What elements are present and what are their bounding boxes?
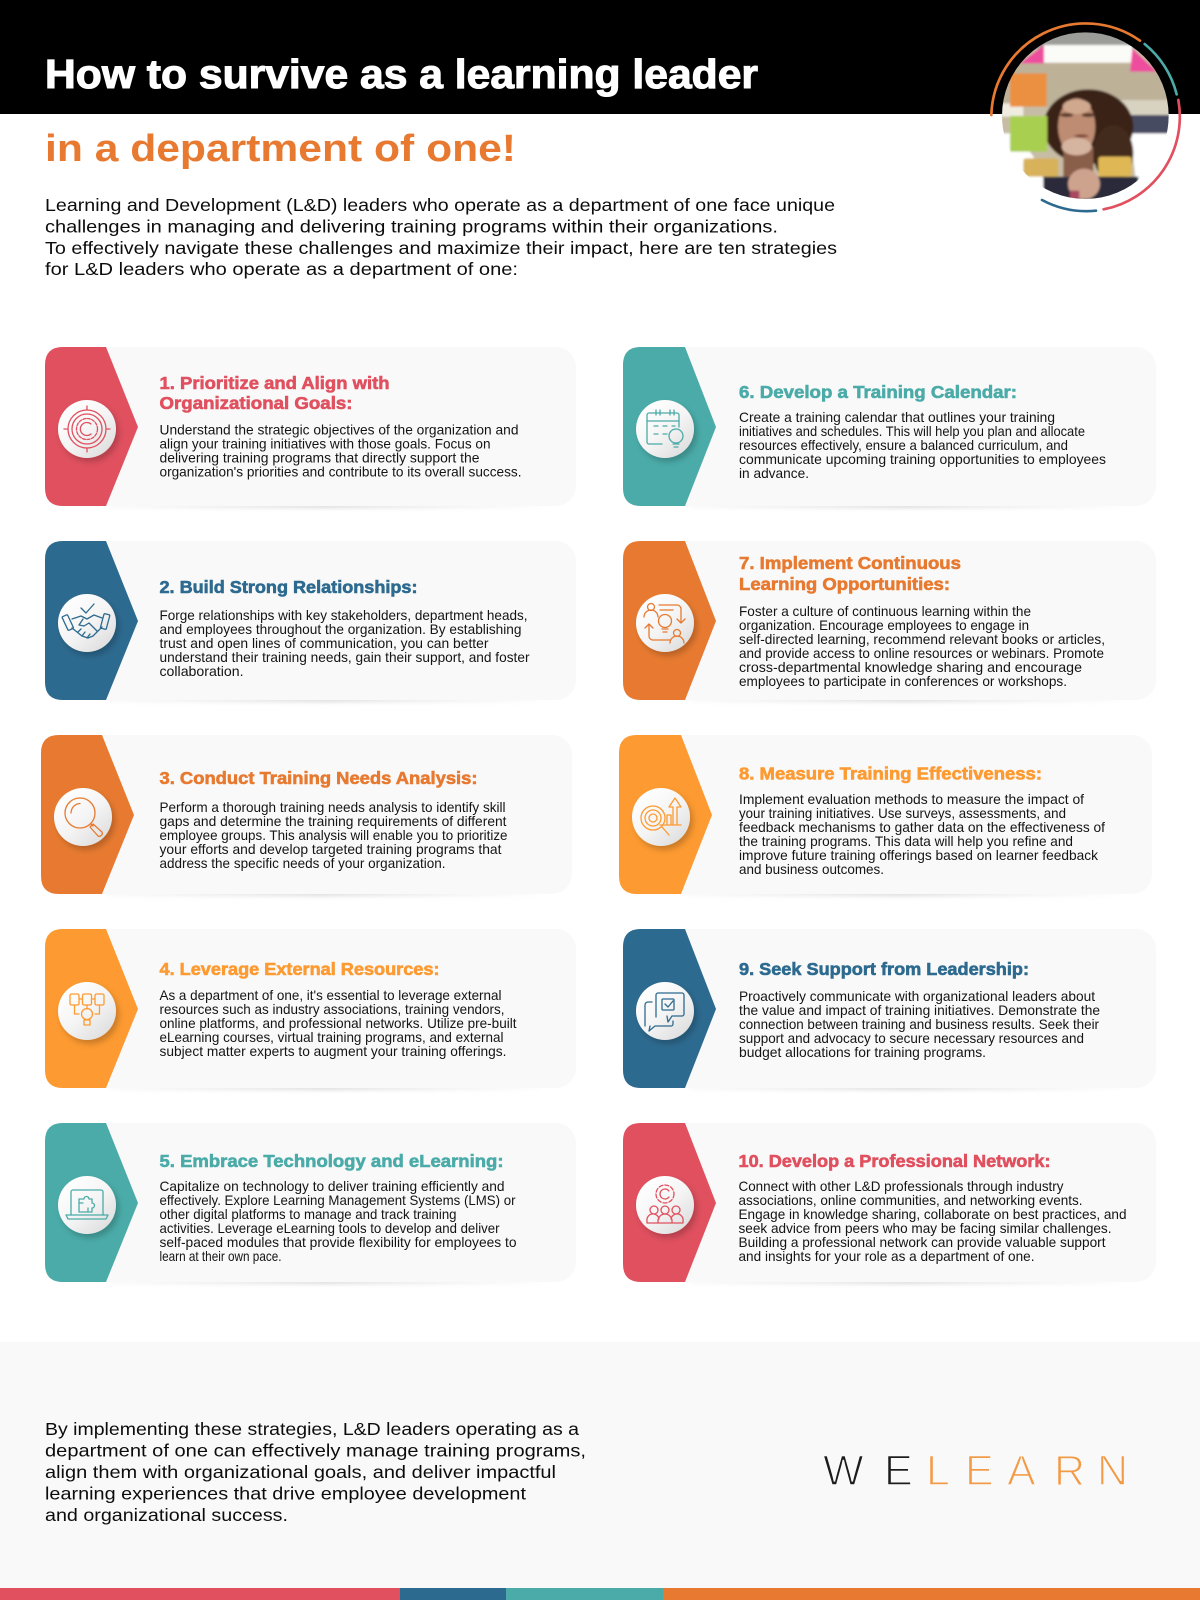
body text	[160, 1179, 516, 1264]
body text: employee groups. This analysis will enable you to prioritize	[160, 828, 508, 843]
body text: Capitalize on technology to deliver training efficiently and	[160, 1179, 504, 1194]
body text: feedback mechanisms to gather data on the effectiveness of	[739, 820, 1105, 835]
heading: 9. Seek Support from Leadership:	[739, 959, 1029, 979]
logo: WE LEARN: WE	[823, 1447, 913, 1495]
panel: strategy 5	[45, 1123, 576, 1284]
icon: handshake	[62, 604, 110, 638]
body text: online platforms, and professional networks. Utilize pre-built	[160, 1016, 517, 1031]
body text: Implement evaluation methods to measure the impact of	[739, 792, 1084, 807]
body text: Forge relationships with key stakeholders, department heads,	[160, 608, 528, 623]
body text: Building a professional network can provide valuable support	[738, 1235, 1106, 1250]
heading: 2. Build Strong Relationships:	[160, 577, 418, 597]
body text: the value and impact of training initiatives. Demonstrate the	[739, 1003, 1100, 1018]
ring arcs	[991, 23, 1140, 115]
body text: improve future training offerings based on learner feedback	[739, 848, 1098, 863]
heading: 1. Prioritize and Align with	[160, 373, 390, 393]
body text: in advance.	[739, 466, 809, 481]
heading: 5. Embrace Technology and eLearning:	[160, 1151, 504, 1171]
intro paragraph: challenges in managing and delivering training programs within their organizations.	[45, 216, 778, 236]
heading: Learning Opportunities:	[739, 574, 950, 594]
body text: collaboration.	[160, 664, 244, 679]
body text	[739, 604, 1105, 689]
body text	[160, 800, 508, 871]
body text: resources such as industry associations, training vendors,	[160, 1002, 504, 1017]
body text: organization. Encourage employees to engage in	[739, 618, 1029, 633]
body text: Connect with other L&D professionals through industry	[738, 1179, 1064, 1194]
closing paragraph: department of one can effectively manage training programs,	[45, 1440, 586, 1460]
body text: cross-departmental knowledge sharing and encourage	[739, 660, 1082, 675]
heading: 10. Develop a Professional Network:	[738, 1151, 1050, 1171]
panel: strategy 9	[623, 929, 1156, 1090]
body text: self-paced modules that provide flexibility for employees to	[160, 1235, 516, 1250]
intro paragraph	[45, 195, 837, 279]
body text: As a department of one, it's essential to leverage external	[160, 988, 502, 1003]
icon: process bulb	[70, 994, 104, 1025]
heading: 6. Develop a Training Calendar:	[739, 382, 1017, 402]
icon: magnifier	[65, 798, 102, 836]
panel: strategy 7	[623, 541, 1156, 702]
heading: 7. Implement Continuous	[739, 553, 961, 573]
icon: target gear	[64, 406, 110, 452]
body text: trust and open lines of communication, you can better	[160, 636, 489, 651]
body text: seek advice from peers who may be facing similar challenges.	[738, 1221, 1112, 1236]
icon: chat check	[645, 993, 684, 1031]
intro paragraph: for L&D leaders who operate as a department of one:	[45, 259, 518, 279]
panel: strategy 8	[619, 735, 1152, 896]
heading: Organizational Goals:	[160, 393, 352, 413]
body text: associations, online communities, and networking events.	[738, 1193, 1082, 1208]
icon: learning cycle	[644, 604, 685, 643]
body text: and provide access to online resources or webinars. Promote	[739, 646, 1104, 661]
body text: Proactively communicate with organizational leaders about	[739, 989, 1095, 1004]
subtitle: in a department of one!	[45, 128, 516, 170]
heading: 4. Leverage External Resources:	[160, 959, 440, 979]
body text: Foster a culture of continuous learning within the	[739, 604, 1031, 619]
body text: support and advocacy to secure necessary resources and	[739, 1031, 1084, 1046]
logo: WE LEARN	[823, 1447, 1128, 1495]
icon: gear people	[647, 1185, 683, 1223]
hair	[1043, 89, 1133, 164]
title: How to survive as a learning leader	[45, 51, 758, 97]
body text: and insights for your role as a department of one.	[738, 1249, 1034, 1264]
heading: 8. Measure Training Effectiveness:	[739, 764, 1042, 784]
body text: communicate upcoming training opportunities to employees	[739, 452, 1106, 467]
body text: and employees throughout the organization. By establishing	[160, 622, 522, 637]
icon: chart magnifier	[641, 798, 681, 835]
body text	[739, 792, 1105, 877]
body text: employees to participate in conferences or workshops.	[739, 674, 1067, 689]
body text: your training initiatives. Use surveys, assessments, and	[739, 806, 1066, 821]
body text: connection between training and business results. Seek their	[739, 1017, 1099, 1032]
panel: strategy 4	[45, 929, 576, 1090]
body text	[739, 989, 1100, 1060]
closing paragraph: and organizational success.	[45, 1505, 288, 1525]
body text: activities. Leverage eLearning tools to develop and deliver	[160, 1221, 500, 1236]
body text: effectively. Explore Learning Management Systems (LMS) or	[160, 1193, 516, 1208]
heading: 3. Conduct Training Needs Analysis:	[160, 768, 478, 788]
body text: eLearning courses, virtual training programs, and external	[160, 1030, 504, 1045]
body text: Create a training calendar that outlines your training	[739, 410, 1055, 425]
body text: self-directed learning, recommend relevant books or articles,	[739, 632, 1105, 647]
body text: subject matter experts to augment your training offerings.	[160, 1044, 506, 1059]
heading	[739, 553, 961, 594]
panel: strategy 10	[623, 1123, 1156, 1284]
closing paragraph: align them with organizational goals, and deliver impactful	[45, 1462, 556, 1482]
body text: your efforts and develop targeted training programs that	[160, 842, 502, 857]
icon: laptop puzzle	[66, 1190, 108, 1219]
body text: gaps and determine the training requirements of different	[160, 814, 507, 829]
body text	[160, 422, 522, 480]
body text: address the specific needs of your organization.	[160, 856, 446, 871]
portrait photo with rings	[991, 23, 1180, 213]
body text: Engage in knowledge sharing, collaborate on best practices, and	[738, 1207, 1126, 1222]
body text	[160, 608, 530, 679]
body text: Perform a thorough training needs analysis to identify skill	[160, 800, 506, 815]
panel: strategy 6	[623, 347, 1156, 508]
body text	[739, 410, 1106, 481]
panel: strategy 1	[45, 347, 576, 508]
closing paragraph: By implementing these strategies, L&D leaders operating as a	[45, 1419, 579, 1439]
body text: understand their training needs, gain their support, and foster	[160, 650, 530, 665]
logo: WE LEARN: LEARN	[926, 1447, 1128, 1495]
body text: and business outcomes.	[739, 862, 884, 877]
body text: the training programs. This data will help you refine and	[739, 834, 1073, 849]
intro paragraph: To effectively navigate these challenges and maximize their impact, here are ten strategies	[45, 238, 837, 258]
intro paragraph: Learning and Development (L&D) leaders who operate as a department of one face unique	[45, 195, 835, 215]
panel: strategy 3	[41, 735, 572, 896]
body text: learn at their own pace.	[160, 1249, 282, 1264]
icon: calendar bulb	[647, 410, 683, 447]
closing paragraph	[45, 1419, 586, 1525]
body text: organization's priorities and contribute to its overall success.	[160, 464, 522, 480]
body text	[160, 988, 517, 1059]
body text: align your training initiatives with those goals. Focus on	[160, 436, 490, 452]
footer panel	[0, 1342, 1200, 1588]
body text	[738, 1179, 1126, 1264]
closing paragraph: learning experiences that drive employee development	[45, 1484, 526, 1504]
body text: initiatives and schedules. This will help you plan and allocate	[739, 424, 1085, 439]
body text: delivering training programs that directly support the	[160, 450, 480, 466]
header band	[0, 0, 1200, 114]
bottom colour bar	[0, 1588, 1200, 1600]
body text: Understand the strategic objectives of the organization and	[160, 422, 518, 438]
body text: resources effectively, ensure a balanced curriculum, and	[739, 438, 1068, 453]
heading	[160, 373, 390, 413]
body text: other digital platforms to manage and track training	[160, 1207, 456, 1222]
panel: strategy 2	[45, 541, 576, 702]
body text: budget allocations for training programs.	[739, 1045, 986, 1060]
